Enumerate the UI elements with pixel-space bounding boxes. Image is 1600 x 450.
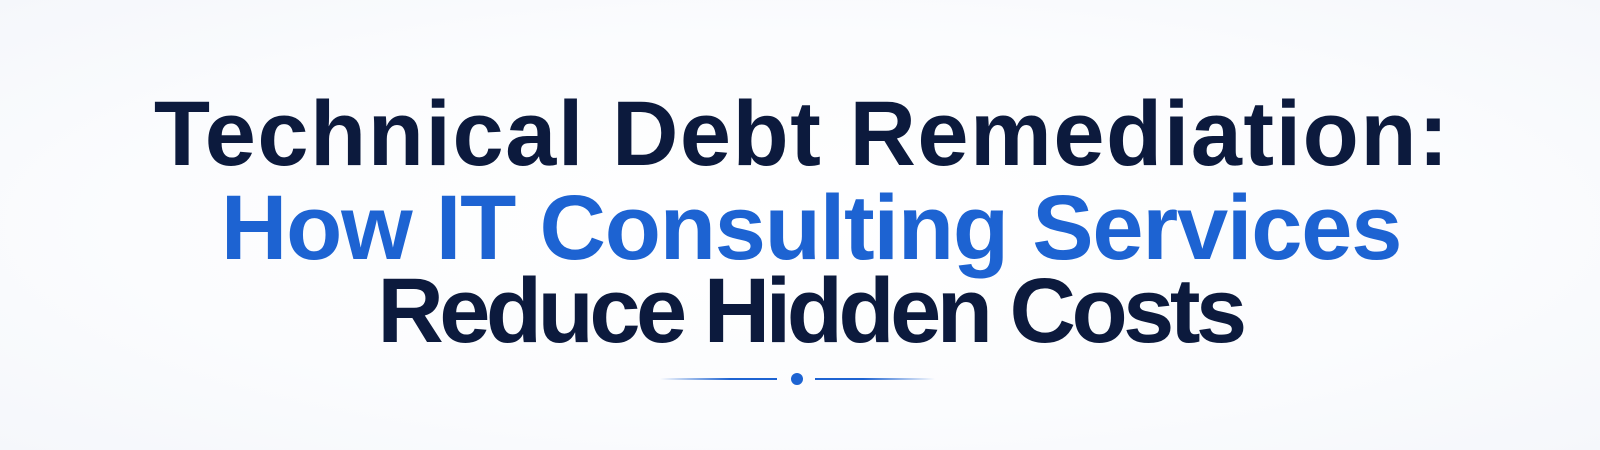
divider ornament xyxy=(662,373,932,385)
title xyxy=(154,83,1450,362)
title line 3: Reduce Hidden Costs xyxy=(377,260,1243,362)
title line 1: Technical Debt Remediation: xyxy=(154,83,1450,185)
title line 2 (highlight): How IT Consulting Services xyxy=(221,177,1401,279)
